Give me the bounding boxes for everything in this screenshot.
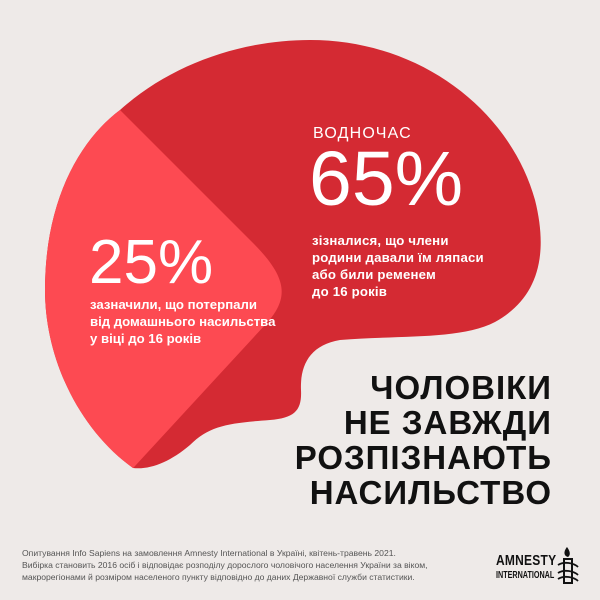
title: НАСИЛЬСТВО [310, 474, 552, 511]
description 65%: або били ременем [312, 267, 436, 282]
title: РОЗПІЗНАЮТЬ [295, 439, 552, 476]
footer source note: Опитування Info Sapiens на замовлення Amnesty International в Україні, квітень-травень 2021. [22, 548, 396, 558]
title: ЧОЛОВІКИ [370, 369, 552, 406]
label: at the same time: ВОДНОЧАС [313, 125, 412, 142]
blob shape [45, 40, 541, 468]
title [295, 369, 552, 511]
logo: Amnesty International: AMNESTY [496, 552, 556, 569]
description 65%: зізналися, що члени [312, 233, 449, 248]
description 25%: зазначили, що потерпали [90, 297, 257, 312]
footer source note: Вибірка становить 2016 осіб і відповідає розподілу дорослого чоловічого населення України за віком, [22, 560, 428, 570]
description 65%: родини давали їм ляпаси [312, 250, 484, 265]
number 65%: 65% [309, 136, 463, 222]
description 65% [312, 233, 484, 299]
description 25%: від домашнього насильства [90, 314, 275, 329]
icon: candle [558, 547, 579, 584]
logo: Amnesty International [496, 547, 579, 584]
description 65%: до 16 років [312, 284, 387, 299]
description 25%: у віці до 16 років [90, 331, 201, 346]
stat 65% block [309, 125, 484, 299]
number 25%: 25% [89, 228, 213, 297]
description 25% [90, 297, 276, 346]
logo: Amnesty International: INTERNATIONAL [496, 570, 554, 581]
stat 25% block [89, 228, 276, 346]
footer source note: макрорегіонами й розміром населеного пункту відповідно до даних Державної служби статистики. [22, 572, 415, 582]
footer source note [22, 548, 428, 582]
title: НЕ ЗАВЖДИ [344, 404, 552, 441]
